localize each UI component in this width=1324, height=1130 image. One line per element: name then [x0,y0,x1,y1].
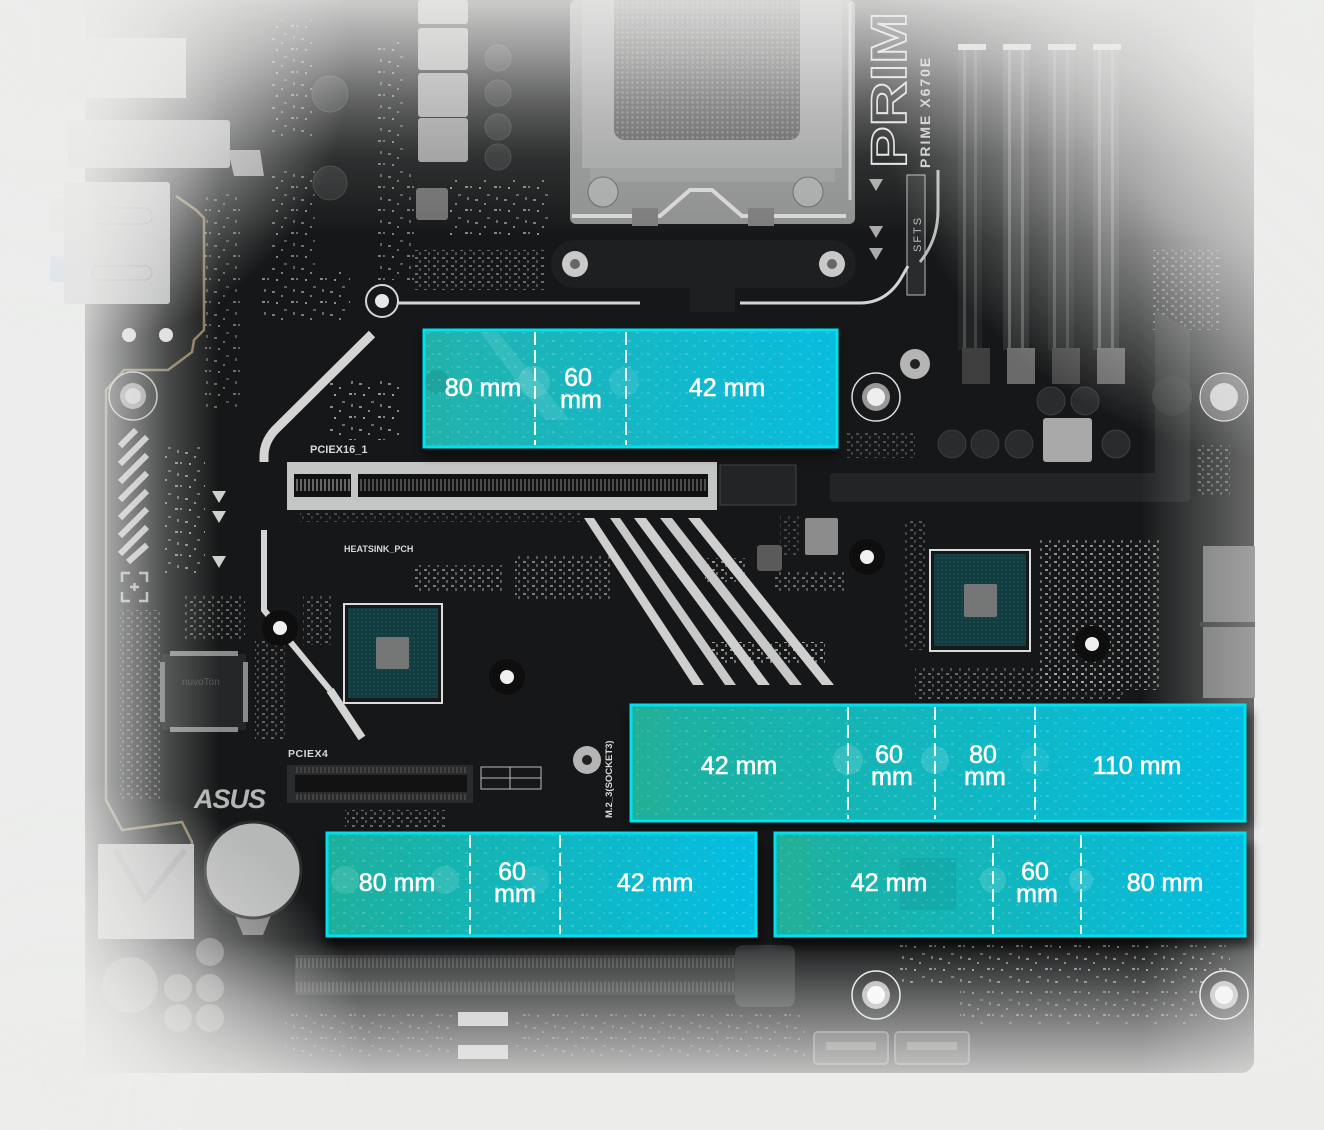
silkscreen label: HEATSINK_PCH: HEATSINK_PCH [344,544,413,554]
PCIe x4 slot [287,765,473,803]
PRIME branding: PRIME X670E [917,56,933,168]
capacitors [312,45,1130,458]
spec table silkscreen [481,767,541,789]
label: 60 mm: mm [1016,880,1058,908]
chip: audio controller [160,651,248,732]
label: 42 mm: 42 mm [617,869,693,897]
CPU socket [570,0,855,226]
CPU retention bracket [551,240,856,312]
white board traces [264,170,938,738]
board power-area heatsink [830,310,1192,502]
PRIME branding [861,12,933,295]
label: 60 mm: 60 [564,364,592,392]
component speckle [120,20,1230,1057]
panel: right-side M.2 slot up to 110 mm [630,705,1252,828]
silkscreen label: M.2_3 socket: M.2_3(SOCKET3) [604,740,615,818]
ASUS logo: ASUS [193,784,266,814]
label: 80 mm: 80 mm [445,374,521,402]
panel: CPU-side M.2 slot [423,330,838,456]
label: 80 mm: mm [964,763,1006,791]
silkscreen label: PCIEX4: PCIEX4 [288,748,328,760]
rear IO connectors [50,38,264,304]
VRM chokes [416,0,468,220]
label: 42 mm: 42 mm [689,374,765,402]
label: 110 mm: 110 mm [1093,752,1181,780]
PCIe x16 slot [287,462,796,510]
label: 60 mm: mm [494,880,536,908]
PRIME branding: PRIM [861,12,917,168]
label: 80 mm: 80 mm [1127,869,1203,897]
right-edge SATA connectors [1200,546,1255,698]
diagonal stripes [584,518,834,685]
inductors [757,518,838,571]
chip: right PCH [929,549,1031,652]
label: 60 mm: 60 [498,858,526,886]
panel: lower-right M.2 slot [774,833,1252,946]
label: 80 mm: 80 mm [359,869,435,897]
label: 42 mm: 42 mm [851,869,927,897]
panel: lower-left M.2 slot [326,833,762,946]
audio shield box [98,844,194,939]
label: 42 mm: 42 mm [701,752,777,780]
label: 60 mm: 60 [875,741,903,769]
hatch strip [120,430,147,562]
label: 60 mm: mm [871,763,913,791]
label: 60 mm: mm [560,386,602,414]
chip: audio controller: nuvoTon [182,677,220,688]
mounting holes [109,285,1248,1019]
aluminium pad [1043,418,1092,462]
bottom capacitors and headers [102,938,969,1064]
chip: left PCH [343,603,443,704]
CMOS battery [205,822,301,935]
lower PCIe slot [295,945,795,1007]
silkscreen label: PCIEX16_1: PCIEX16_1 [310,444,367,456]
PRIME branding: SFTS [912,216,924,252]
gold trace [106,196,204,882]
triangle markers [212,179,883,568]
target marker [122,573,147,601]
label: 80 mm: 80 [969,741,997,769]
label: 60 mm: 60 [1021,858,1049,886]
DIMM slots [958,44,1125,384]
